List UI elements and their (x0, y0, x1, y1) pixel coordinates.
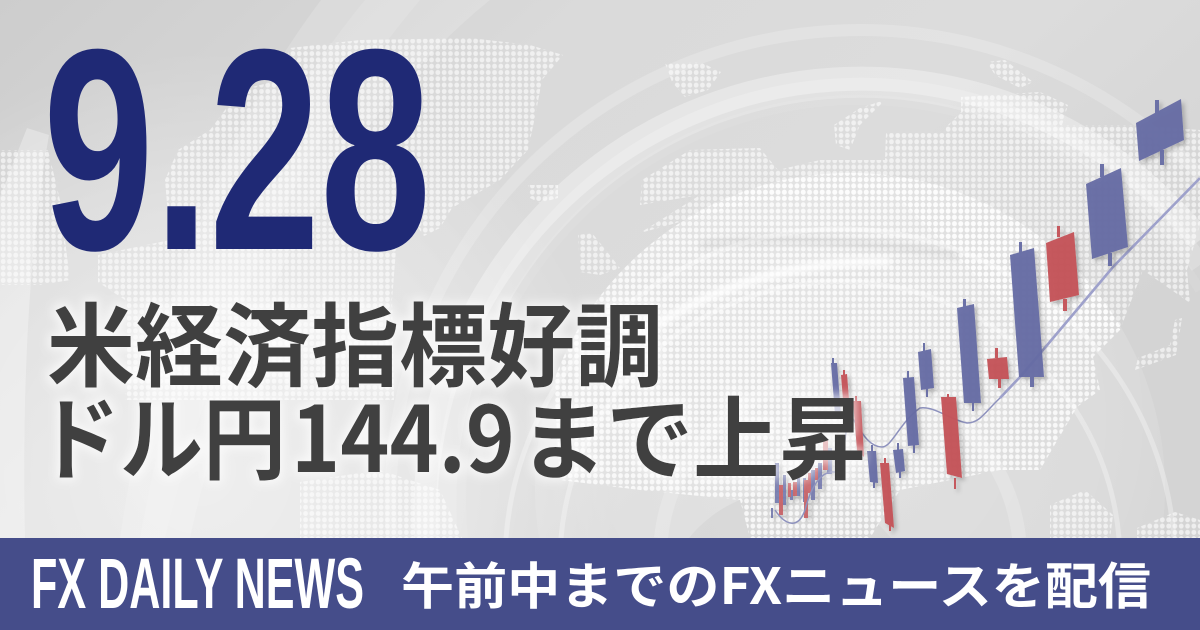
headline line 2 (37, 367, 866, 499)
globe disc (535, 173, 1165, 538)
footer band (0, 538, 1200, 630)
bright continents inside the globe (555, 173, 1120, 538)
concentric rings (390, 30, 1200, 538)
small distant candles (771, 440, 832, 518)
moving average line lower (775, 398, 1000, 523)
footer tagline: 午前中までのFXニュースを配信 (401, 547, 1151, 619)
moving average line upper (1000, 178, 1200, 398)
red candles (841, 226, 1079, 531)
left sweeping bands (0, 0, 490, 538)
headline line 2: 144.9 (291, 367, 515, 499)
headline line 1: 米経済指標好調 (47, 274, 663, 406)
blue candles (831, 99, 1184, 488)
candlestick chart (771, 99, 1200, 531)
footer brand: FX DAILY NEWS (31, 545, 364, 624)
world map dots (0, 38, 1200, 538)
headline line 2: まで上昇 (520, 367, 866, 499)
headline (37, 274, 866, 499)
headline line 2: ドル円 (37, 367, 286, 499)
continents outside the globe (0, 38, 1200, 538)
